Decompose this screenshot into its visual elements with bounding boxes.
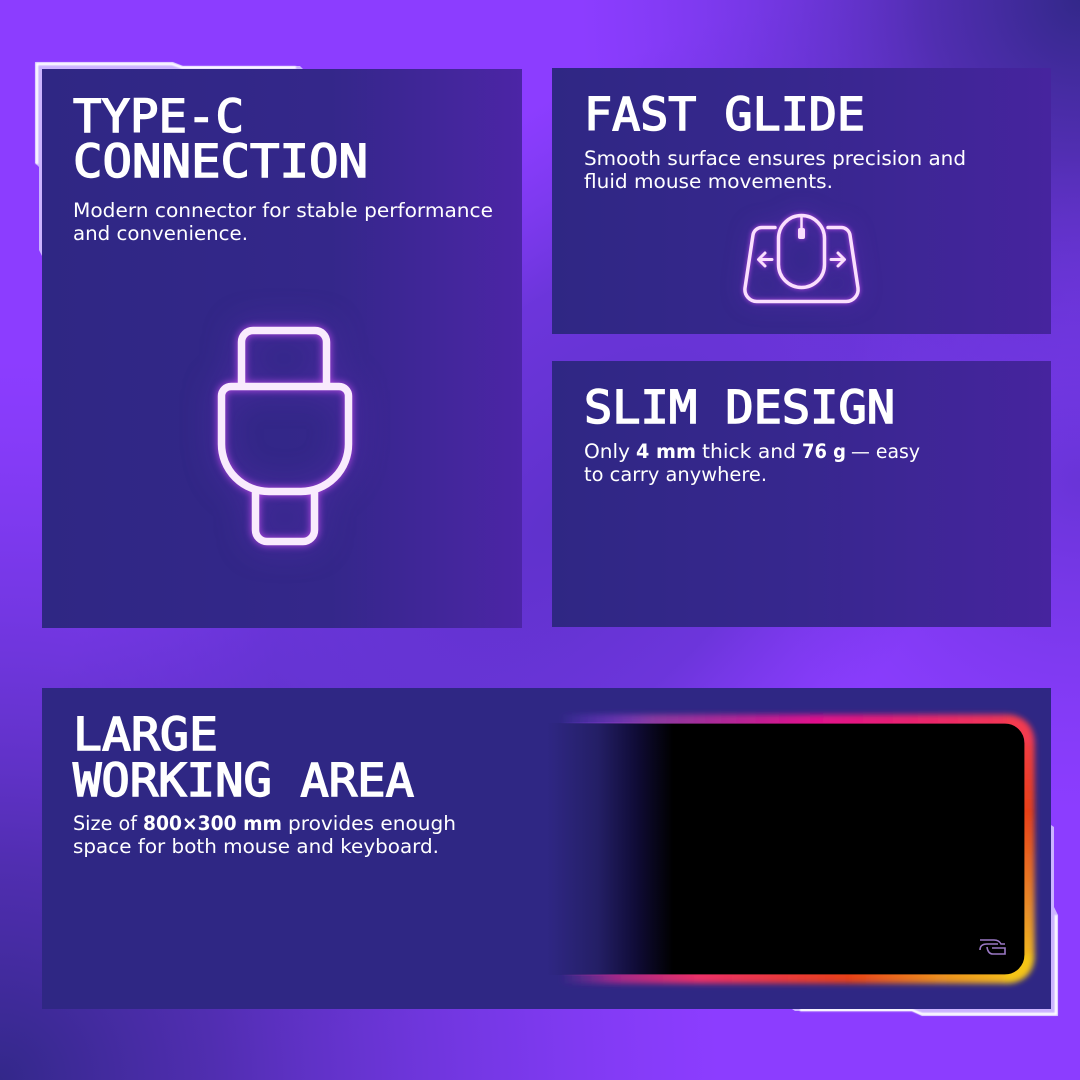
text: slim design description: 4 mm <box>636 440 696 463</box>
text: type-c description: Modern connector for stable performance <box>73 199 493 222</box>
mat edge highlight <box>560 723 1025 975</box>
text: slim design description: — easy <box>851 440 920 463</box>
heading: large working area <box>73 708 414 807</box>
rgb glow <box>560 724 1025 974</box>
mat surface <box>547 723 1025 975</box>
text: large working area description: 800×300 mm <box>143 812 282 835</box>
heading: slim design: SLIM DESIGN <box>584 381 895 434</box>
heading: fast glide: FAST GLIDE <box>584 88 865 141</box>
text: fast glide description: fluid mouse movements. <box>584 170 833 193</box>
icon: mouse on pad with arrows <box>745 216 858 302</box>
text: large working area description: Size of <box>73 812 138 835</box>
text: large working area description: space for both mouse and keyboard. <box>73 835 439 858</box>
text: type-c description <box>73 199 493 245</box>
heading: type-c connection: CONNECTION <box>73 135 368 188</box>
text: slim design description: Only <box>584 440 630 463</box>
text: fast glide description: Smooth surface ensures precision and <box>584 147 966 170</box>
panel: slim design <box>552 361 1051 627</box>
heading: large working area: WORKING AREA <box>73 754 414 807</box>
text: slim design description: thick and <box>702 440 796 463</box>
mouse pad with rgb edge glow <box>547 723 1025 975</box>
panel: type-c connection <box>42 69 522 628</box>
mat fade into panel <box>547 723 673 975</box>
panel: fast glide <box>552 68 1051 334</box>
heading: type-c connection <box>73 90 368 188</box>
text: slim design description: to carry anywhere. <box>584 463 767 486</box>
heading: type-c connection: TYPE-C <box>73 90 244 143</box>
text: slim design description: 76 g <box>802 440 846 463</box>
panel: large working area <box>42 688 1051 1009</box>
text: slim design description <box>584 440 920 486</box>
text: fast glide description <box>584 147 966 193</box>
icon: brand logo <box>980 940 1005 954</box>
icon: usb type-c plug <box>222 330 348 542</box>
glowing frame accent: bottom right <box>792 825 1058 1016</box>
glowing frame accent: top left <box>35 62 303 256</box>
text: type-c description: and convenience. <box>73 222 248 245</box>
heading: large working area: LARGE <box>73 708 218 761</box>
text: large working area description: provides enough <box>288 812 456 835</box>
text: large working area description <box>73 812 456 858</box>
